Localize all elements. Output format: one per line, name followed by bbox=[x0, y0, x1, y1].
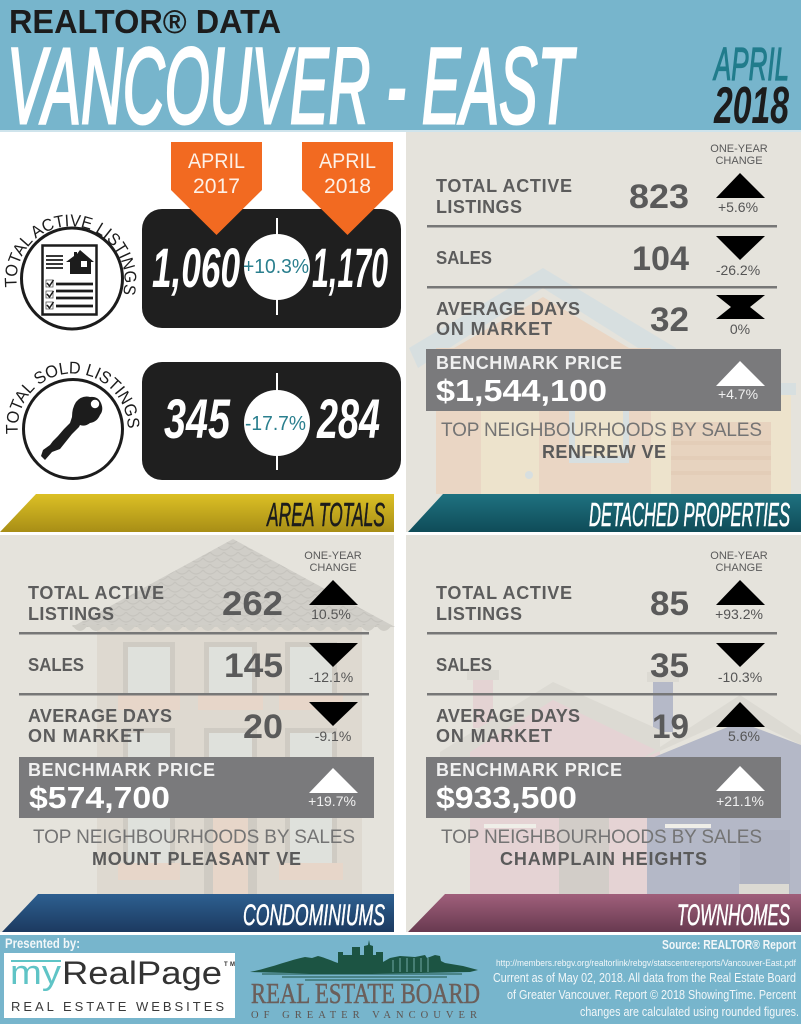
row: average days on market bbox=[436, 702, 765, 746]
row: average days on market: 0% bbox=[730, 321, 750, 337]
stat box: total sold listings bbox=[142, 362, 401, 480]
row: sales: 104 bbox=[632, 240, 689, 278]
logo: myRealPage: TM bbox=[224, 962, 235, 968]
stat box: total sold listings: 345 bbox=[164, 387, 231, 450]
row: total active listings: LISTINGS bbox=[436, 604, 522, 624]
benchmark price block bbox=[19, 757, 374, 818]
row: average days on market bbox=[28, 702, 358, 746]
row: total active listings bbox=[436, 580, 765, 624]
column heading: one-year change: ONE-YEAR bbox=[710, 143, 768, 155]
banner: area totals: AREA TOTALS bbox=[266, 496, 385, 533]
row: average days on market: AVERAGE DAYS bbox=[436, 299, 580, 319]
row: average days on market: -9.1% bbox=[315, 728, 351, 744]
stat box: total active listings: +10.3% bbox=[243, 256, 309, 278]
row: sales bbox=[436, 236, 765, 278]
top neighbourhoods: RENFREW VE bbox=[542, 442, 666, 462]
tab: April 2018 bbox=[302, 142, 393, 235]
column heading: one-year change: CHANGE bbox=[309, 562, 357, 574]
column heading: one-year change: CHANGE bbox=[715, 562, 763, 574]
top neighbourhoods: MOUNT PLEASANT VE bbox=[92, 849, 301, 869]
stat box: total sold listings: -17.7% bbox=[245, 413, 306, 435]
benchmark price block: BENCHMARK PRICE bbox=[28, 760, 215, 780]
row: total active listings: +93.2% bbox=[715, 606, 763, 622]
row: average days on market: ON MARKET bbox=[436, 726, 552, 746]
panel: townhomes bbox=[406, 535, 801, 932]
row: total active listings bbox=[28, 580, 358, 624]
row: total active listings: 10.5% bbox=[311, 606, 351, 622]
column heading: one-year change bbox=[304, 550, 362, 574]
column heading: one-year change: ONE-YEAR bbox=[304, 550, 362, 562]
top neighbourhoods bbox=[441, 827, 762, 869]
logo: myRealPage bbox=[4, 953, 235, 1018]
ring label: total sold listings: TOTAL SOLD LISTINGS bbox=[6, 362, 140, 434]
benchmark price block: +19.7% bbox=[308, 793, 356, 809]
benchmark price block: BENCHMARK PRICE bbox=[436, 760, 622, 780]
row: total active listings: TOTAL ACTIVE bbox=[436, 176, 572, 196]
banner: condominiums bbox=[2, 894, 394, 932]
tab: April 2017 bbox=[171, 142, 262, 235]
row: total active listings: LISTINGS bbox=[436, 197, 522, 217]
panel: detached properties bbox=[406, 132, 801, 533]
row: total active listings: TOTAL ACTIVE bbox=[28, 583, 164, 603]
row: sales: -10.3% bbox=[718, 669, 762, 685]
row: average days on market: 5.6% bbox=[728, 728, 760, 744]
icon: listing document bbox=[22, 228, 122, 329]
row: average days on market: 20 bbox=[243, 708, 283, 746]
top neighbourhoods: TOP NEIGHBOURHOODS BY SALES bbox=[441, 827, 762, 848]
row: sales: 145 bbox=[224, 647, 283, 685]
background illustration: townhouses bbox=[440, 670, 801, 894]
row: sales: -26.2% bbox=[716, 262, 760, 278]
row: average days on market: 32 bbox=[650, 301, 689, 339]
panel: area totals bbox=[0, 142, 401, 533]
background illustration: apartment building bbox=[72, 539, 395, 894]
row: average days on market bbox=[436, 295, 765, 339]
benchmark price block: $574,700 bbox=[29, 780, 170, 815]
logo: myRealPage: RealPage bbox=[62, 955, 222, 991]
logo: myRealPage: my bbox=[10, 954, 61, 992]
column heading: one-year change: ONE-YEAR bbox=[710, 550, 768, 562]
source note bbox=[493, 937, 799, 1019]
tab: April 2017: 2017 bbox=[193, 175, 240, 198]
benchmark price block: +21.1% bbox=[716, 793, 764, 809]
stat box: total active listings bbox=[142, 209, 401, 328]
row: sales bbox=[436, 643, 765, 685]
row: sales: 35 bbox=[650, 647, 689, 685]
logo: Real Estate Board of Greater Vancouver: OF GREATER VANCOUVER bbox=[251, 1010, 477, 1021]
ring label: total active listings: TOTAL ACTIVE LISTINGS bbox=[4, 214, 136, 295]
panel: condominiums bbox=[0, 535, 395, 932]
banner: townhomes bbox=[408, 894, 801, 932]
row: average days on market: AVERAGE DAYS bbox=[436, 706, 580, 726]
banner: detached properties bbox=[408, 494, 801, 533]
benchmark price block: +4.7% bbox=[718, 386, 758, 402]
row: sales bbox=[28, 643, 358, 685]
row: total active listings: LISTINGS bbox=[28, 604, 114, 624]
row: total active listings: 262 bbox=[222, 585, 283, 623]
benchmark price block bbox=[426, 757, 781, 818]
row: total active listings: +5.6% bbox=[718, 199, 758, 215]
logo: myRealPage: REAL ESTATE WEBSITES bbox=[11, 999, 224, 1014]
icon: key bbox=[24, 380, 122, 478]
heading: REALTOR DATA: REALTOR® DATA bbox=[9, 3, 281, 40]
header band bbox=[0, 0, 801, 146]
top neighbourhoods: TOP NEIGHBOURHOODS BY SALES bbox=[33, 827, 355, 848]
tab: April 2018: APRIL bbox=[319, 150, 376, 173]
top neighbourhoods bbox=[441, 420, 762, 462]
stat box: total sold listings: 284 bbox=[316, 387, 380, 450]
row: average days on market: ON MARKET bbox=[436, 319, 552, 339]
row: total active listings: 85 bbox=[650, 585, 689, 623]
footer band bbox=[0, 935, 801, 1024]
row: average days on market: 19 bbox=[652, 708, 689, 746]
row: total active listings: 823 bbox=[629, 178, 689, 216]
row: total active listings bbox=[436, 173, 765, 217]
column heading: one-year change bbox=[710, 550, 768, 574]
row: sales: SALES bbox=[436, 248, 492, 268]
presented by label: Presented by: bbox=[5, 935, 80, 951]
top neighbourhoods bbox=[33, 827, 355, 869]
logo: Real Estate Board of Greater Vancouver bbox=[250, 940, 480, 1021]
stat box: total active listings: 1,170 bbox=[312, 236, 388, 299]
column heading: one-year change: CHANGE bbox=[715, 155, 763, 167]
benchmark price block: BENCHMARK PRICE bbox=[436, 353, 622, 373]
logo: Real Estate Board of Greater Vancouver: REAL ESTATE BOARD bbox=[251, 979, 480, 1010]
row: total active listings: TOTAL ACTIVE bbox=[436, 583, 572, 603]
benchmark price block: $1,544,100 bbox=[436, 373, 607, 408]
column heading: one-year change bbox=[710, 143, 768, 167]
row: average days on market: AVERAGE DAYS bbox=[28, 706, 172, 726]
tab: April 2018: 2018 bbox=[324, 175, 371, 198]
tab: April 2017: APRIL bbox=[188, 150, 245, 173]
row: sales: SALES bbox=[436, 655, 492, 675]
skyline bbox=[250, 940, 478, 974]
benchmark price block: $933,500 bbox=[436, 780, 577, 815]
top neighbourhoods: TOP NEIGHBOURHOODS BY SALES bbox=[441, 420, 762, 441]
benchmark price block bbox=[426, 349, 781, 411]
top neighbourhoods: CHAMPLAIN HEIGHTS bbox=[500, 849, 707, 869]
banner: area totals bbox=[0, 494, 394, 533]
row: sales: SALES bbox=[28, 655, 84, 675]
stat box: total active listings: 1,060 bbox=[152, 236, 240, 299]
banner: condominiums: CONDOMINIUMS bbox=[243, 899, 385, 932]
row: sales: -12.1% bbox=[309, 669, 353, 685]
row: average days on market: ON MARKET bbox=[28, 726, 144, 746]
background illustration: detached house bbox=[409, 268, 796, 494]
